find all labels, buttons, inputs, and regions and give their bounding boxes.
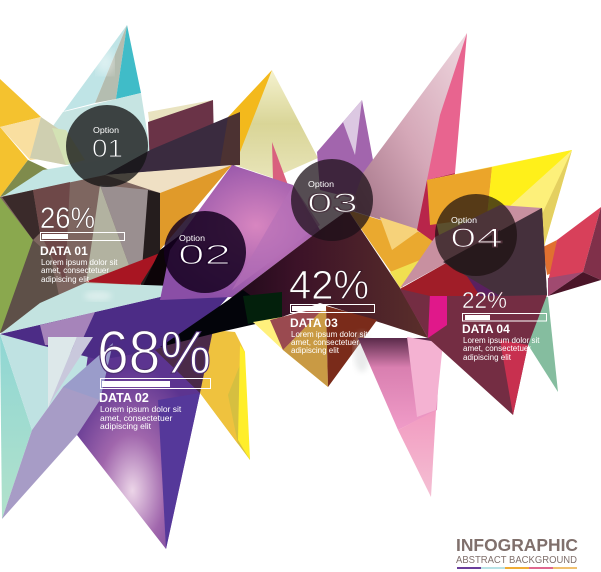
badge: option 01 bbox=[66, 105, 148, 187]
badge: option 01: Option bbox=[93, 126, 119, 135]
data block 03: amet, consectetuer bbox=[291, 338, 359, 347]
badge: option 02 bbox=[164, 211, 246, 293]
data block 04: Lorem ipsum dolor sit bbox=[463, 336, 540, 345]
data block 03: 42% bbox=[289, 262, 369, 308]
badge: option 04 bbox=[435, 194, 517, 276]
badge: option 02: 02 bbox=[178, 239, 231, 270]
data block 04: DATA 04 bbox=[462, 322, 510, 336]
data block 03: Lorem ipsum dolor sit bbox=[291, 330, 368, 339]
data block 01 bbox=[40, 202, 124, 284]
data block 04: 22% bbox=[462, 287, 507, 313]
badge: option 01: 01 bbox=[92, 135, 123, 163]
data block 02 bbox=[97, 319, 211, 431]
shards: centre bbox=[160, 33, 467, 387]
data block 01: amet, consectetuer bbox=[41, 266, 109, 275]
data block 01: DATA 01 bbox=[40, 244, 88, 258]
data block 01: 26% bbox=[40, 202, 95, 235]
shards: lower left purple and teal bbox=[0, 280, 250, 549]
data block 01: adipiscing elit bbox=[41, 275, 90, 284]
badge: option 04: Option bbox=[451, 216, 477, 225]
data block 03: adipiscing elit bbox=[291, 346, 340, 355]
data block 02: amet, consectetuer bbox=[100, 413, 172, 423]
data block 04 bbox=[462, 287, 546, 362]
badge: option 03: 03 bbox=[307, 188, 358, 218]
title: infographic abstract background: INFOGRAPHIC bbox=[456, 535, 578, 555]
badge: option 03: Option bbox=[308, 180, 334, 189]
highlights bbox=[84, 50, 113, 301]
data block 02: DATA 02 bbox=[99, 391, 149, 405]
data block 03 bbox=[289, 262, 374, 355]
data block 02: Lorem ipsum dolor sit bbox=[100, 404, 182, 414]
title: infographic abstract background bbox=[456, 535, 578, 569]
data block 04: amet, consectetuer bbox=[463, 344, 531, 353]
shards: right bbox=[358, 33, 601, 497]
data block 03: DATA 03 bbox=[290, 316, 338, 330]
title: infographic abstract background: ABSTRACT BACKGROUND bbox=[456, 554, 577, 566]
shards: left cluster bbox=[0, 25, 240, 333]
data block 04: adipiscing elit bbox=[463, 353, 512, 362]
data block 02: adipiscing elit bbox=[100, 421, 152, 431]
badge: option 04: 04 bbox=[450, 223, 503, 253]
badge: option 02: Option bbox=[179, 234, 205, 243]
data block 02: 68% bbox=[97, 319, 211, 386]
data block 01: Lorem ipsum dolor sit bbox=[41, 258, 118, 267]
badge: option 03 bbox=[291, 159, 373, 241]
